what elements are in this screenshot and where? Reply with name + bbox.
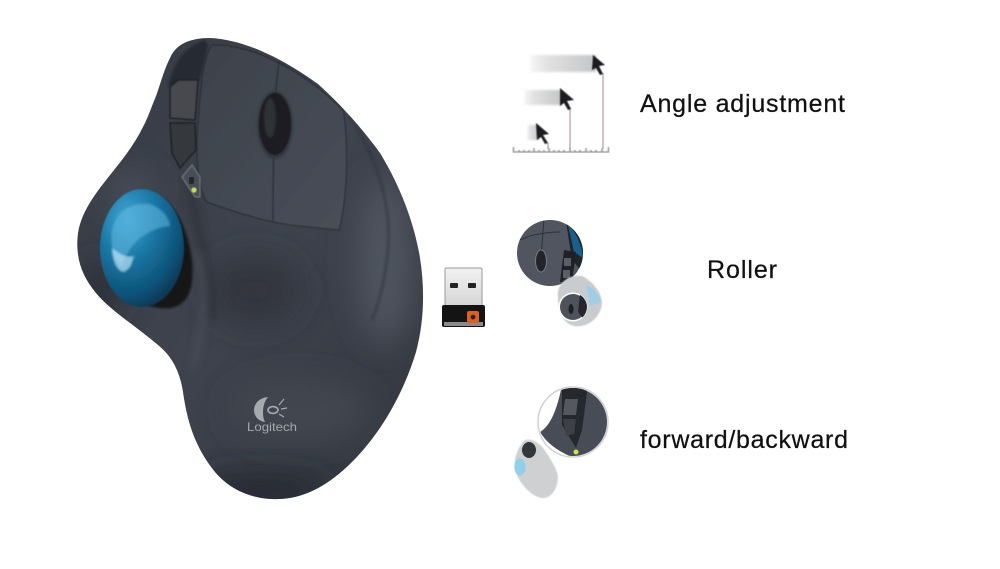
label: roller: Roller [707,256,777,284]
infographic canvas [77,38,846,500]
main buttons panel [197,45,347,230]
logitech logo [247,397,297,434]
battery indicator LED [182,165,200,197]
icon: forward/backward [514,386,609,498]
side button: backward [170,123,196,168]
ruler [514,147,608,152]
label: angle adjustment: Angle adjustment [640,90,845,118]
blue trackball [100,189,184,307]
side button: forward [170,80,198,120]
scroll wheel [257,91,293,159]
trackball socket [120,190,192,308]
icon: angle adjustment cursors [514,55,608,152]
usb receiver [442,268,485,327]
icon: roller [517,215,602,326]
trackball mouse [77,38,423,506]
label: forward/backward: forward/backward [640,426,848,454]
height lines [548,73,603,149]
cursors [536,55,605,144]
cursor trails [524,55,596,140]
logitech logo: Logitech [247,420,297,434]
